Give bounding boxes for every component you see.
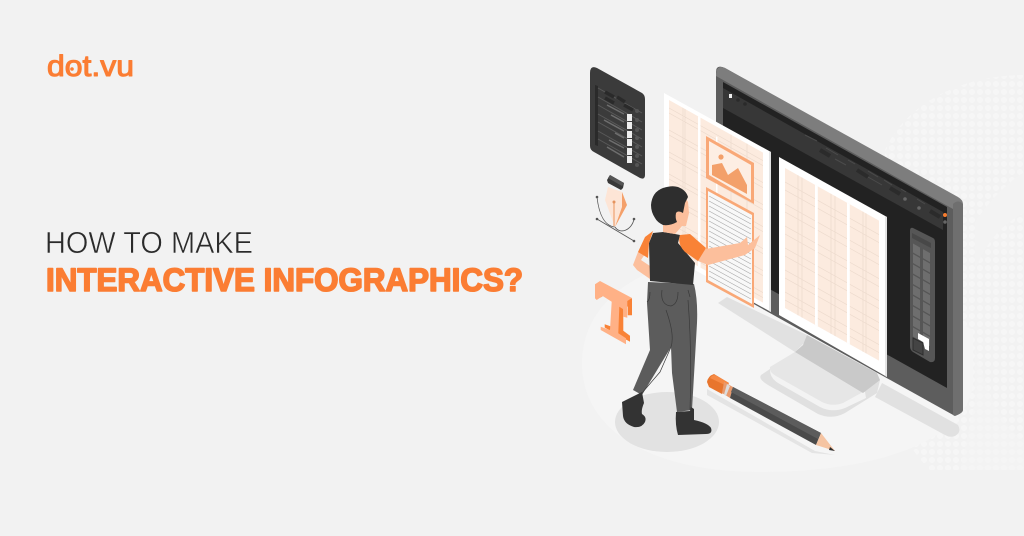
screen toolbar xyxy=(723,88,943,230)
heading line 2: INTERACTIVE INFOGRAPHICS? xyxy=(46,262,523,298)
pencil eraser xyxy=(707,374,729,394)
pencil tip xyxy=(816,433,835,451)
left boot xyxy=(622,392,646,427)
pen tool icon xyxy=(596,175,635,242)
monitor side xyxy=(953,202,963,416)
monitor stand xyxy=(760,335,880,417)
pencil xyxy=(707,374,835,455)
infographic canvas xyxy=(47,54,963,454)
right sleeve xyxy=(679,234,706,261)
vest xyxy=(649,232,695,285)
hair xyxy=(651,186,688,225)
floor blob xyxy=(582,240,973,472)
monitor shadow on floor xyxy=(718,297,959,437)
background dot pattern xyxy=(880,75,1024,475)
monitor xyxy=(716,67,963,416)
pencil shadow xyxy=(707,389,835,455)
screen toolbar lines xyxy=(805,135,940,217)
screen indicator dots xyxy=(729,94,947,224)
left sleeve xyxy=(638,231,653,258)
neck and face xyxy=(663,196,689,234)
right arm xyxy=(698,235,760,265)
text card xyxy=(706,187,754,308)
screen xyxy=(723,82,947,388)
monitor top edge xyxy=(716,67,963,209)
letter T icon xyxy=(595,281,632,344)
heading line 1: HOW TO MAKE xyxy=(45,226,253,260)
pants xyxy=(633,282,697,412)
logo: dot.vu xyxy=(47,50,134,83)
floor shadow xyxy=(615,392,719,452)
left arm xyxy=(633,252,650,279)
tools panel xyxy=(590,67,645,179)
sheet: left layout xyxy=(664,93,771,312)
pencil bands xyxy=(722,382,733,398)
sheet peach grid xyxy=(669,100,763,303)
screen side panel xyxy=(910,228,935,362)
sheet: right layout xyxy=(779,157,887,377)
person xyxy=(615,186,760,452)
monitor frame front xyxy=(716,67,955,416)
right sheet peach grid xyxy=(785,168,879,361)
right boot xyxy=(676,407,711,435)
image card xyxy=(706,136,754,204)
pencil body xyxy=(730,387,821,445)
